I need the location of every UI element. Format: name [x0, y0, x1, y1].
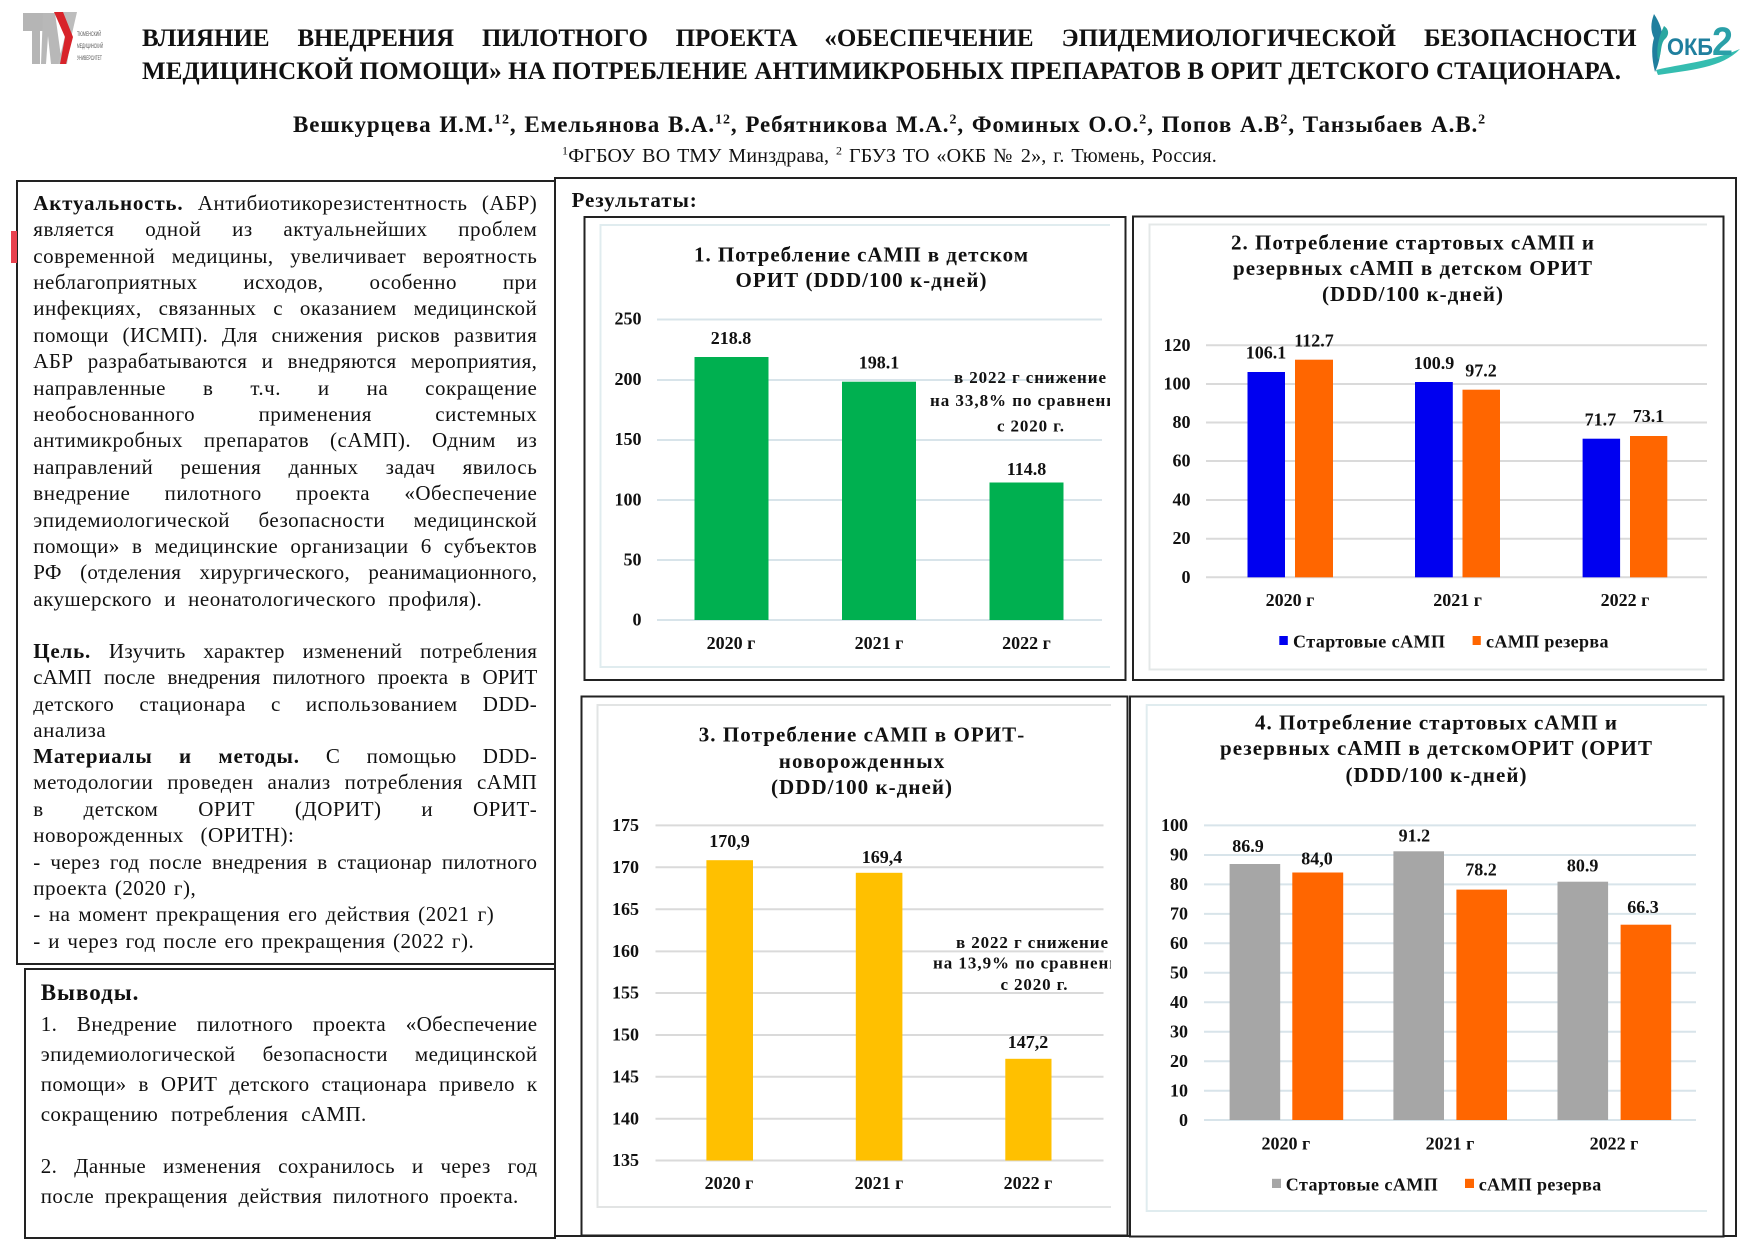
chart 2 y axis labels: 40	[1172, 490, 1190, 510]
title: «ОБЕСПЕЧЕНИЕ	[824, 25, 1034, 52]
chart 3 title: (DDD/100 к-дней)	[771, 775, 952, 799]
chart 3 y axis labels: 170	[612, 857, 639, 877]
chart 2 y axis labels: 60	[1172, 450, 1190, 470]
chart 4 y axis labels: 80	[1170, 874, 1188, 894]
chart 4 x labels: 2022 г	[1590, 1134, 1638, 1154]
chart 1 x labels: 2021 г	[855, 633, 903, 653]
text: relevance: внедрение пилотного проекта «Обеспечение	[33, 481, 537, 505]
chart 2 legend: Стартовые сАМП	[1293, 632, 1445, 652]
text: relevance: РФ (отделения хирургического, реанимационного,	[33, 560, 537, 584]
chart 3 y axis labels: 165	[612, 899, 639, 919]
chart 1 x labels: 2020 г	[707, 633, 755, 653]
chart 2 legend	[1279, 632, 1608, 652]
chart 2 plot	[1164, 331, 1707, 610]
panel: conclusions	[24, 968, 556, 1239]
text: conclusion 1: помощи» в ОРИТ детского стационара привело к	[41, 1072, 537, 1096]
title: ВНЕДРЕНИЯ	[298, 25, 454, 52]
text: conclusion 2: после прекращения действия пилотного проекта.	[41, 1184, 519, 1208]
chart 2 x labels: 2020 г	[1266, 590, 1314, 610]
text: relevance: направлений решения данных задач явилось	[33, 455, 537, 479]
chart 2 bars: reserve	[1295, 360, 1667, 577]
chart 1 values: 218.8	[711, 328, 751, 348]
chart 1 title: ОРИТ (DDD/100 к-дней)	[736, 268, 986, 292]
chart 3 x labels	[705, 1173, 1052, 1193]
text: materials and methods: Материалы и методы. С помощью DDD-	[33, 744, 537, 768]
text: materials and methods: - на момент прекращения его действия (2021 г)	[33, 902, 494, 926]
chart 4 y axis labels	[1161, 815, 1188, 1130]
chart 1 y axis labels: 50	[624, 550, 642, 570]
chart 3 title: новорожденных	[779, 749, 945, 773]
chart 3 values: 170,9	[709, 831, 750, 851]
title: МЕДИЦИНСКОЙ ПОМОЩИ» НА ПОТРЕБЛЕНИЕ АНТИМИКРОБНЫХ ПРЕПАРАТОВ В ОРИТ ДЕТСКОГО СТАЦИОНАРА.	[142, 57, 1621, 85]
chart 2 x labels	[1266, 590, 1649, 610]
chart 1 title: 1. Потребление сАМП в детском	[694, 242, 1028, 266]
logo: Tyumen Medical University	[23, 12, 103, 64]
text: aim: анализа	[33, 718, 106, 742]
chart 3 values: 147,2	[1008, 1032, 1048, 1052]
chart 2 x labels: 2021 г	[1433, 590, 1482, 610]
chart 4 y axis labels: 50	[1170, 962, 1188, 982]
text: conclusion 1: сокращению потребления сАМП.	[41, 1102, 367, 1126]
chart 3 y axis labels: 155	[612, 982, 639, 1002]
chart 2 title: (DDD/100 к-дней)	[1322, 282, 1503, 306]
chart 4 x labels: 2021 г	[1426, 1134, 1474, 1154]
chart 1 y axis labels	[614, 308, 642, 630]
chart 3 values: 169,4	[862, 847, 902, 867]
chart 3 y axis labels: 140	[612, 1108, 639, 1128]
chart 1 x labels	[707, 633, 1051, 653]
text: conclusion 2: 2. Данные изменения сохранилось и через год	[41, 1154, 537, 1178]
chart 3 y axis labels	[612, 815, 639, 1170]
chart 3 y axis labels: 160	[612, 941, 639, 961]
chart 4 values	[1232, 825, 1659, 917]
text: relevance: необоснованного применения системных	[33, 402, 537, 426]
chart 4 title: резервных сАМП в детскомОРИТ (ОРИТ	[1220, 736, 1652, 760]
chart 1 annotation: на 33,8% по сравнению	[930, 391, 1130, 410]
logo: OKB 2: ОКБ	[1667, 34, 1713, 61]
chart 2 y axis labels: 20	[1172, 528, 1190, 548]
panel: results	[554, 177, 1737, 1237]
chart 2 values	[1246, 331, 1664, 429]
chart 2 values: 112.7	[1294, 331, 1334, 351]
text: materials and methods: методологии проведен анализ потребления сАМП	[33, 770, 537, 794]
chart 4 values: 84,0	[1301, 848, 1333, 868]
chart 4 values: 86.9	[1232, 836, 1264, 856]
chart 3 x labels: 2020 г	[705, 1173, 753, 1193]
affiliations: 1ФГБОУ ВО ТМУ Минздрава, 2 ГБУЗ ТО «ОКБ № 2», г. Тюмень, Россия.	[562, 143, 1217, 167]
chart 4 legend: Стартовые сАМП	[1286, 1175, 1438, 1195]
chart 2 x labels: 2022 г	[1601, 590, 1649, 610]
chart 2 y axis labels: 80	[1172, 412, 1190, 432]
text: relevance: Актуальность. Антибиотикорезистентность (АБР)	[33, 191, 537, 215]
heading: conclusions: Выводы.	[41, 980, 139, 1005]
chart 4 y axis labels: 20	[1170, 1051, 1188, 1071]
chart 3 plot	[612, 815, 1104, 1193]
chart 4 legend: сАМП резерва	[1479, 1175, 1601, 1195]
chart 1 bars	[694, 357, 1064, 620]
chart 4 y axis labels: 10	[1170, 1080, 1188, 1100]
text: relevance: антимикробных препаратов (сАМП). Одним из	[33, 428, 537, 452]
chart 1 y axis labels: 0	[632, 610, 642, 630]
chart 1 y axis labels: 100	[614, 490, 642, 510]
chart 4 y axis labels: 60	[1170, 933, 1188, 953]
text: relevance: является одной из актуальнейших проблем	[33, 217, 537, 241]
chart 2 y axis labels	[1164, 335, 1190, 587]
chart 3 y axis labels: 150	[612, 1024, 639, 1044]
text: materials and methods: - через год после внедрения в стационар пилотного	[33, 850, 537, 874]
chart 4 title: (DDD/100 к-дней)	[1346, 763, 1526, 787]
chart 4 y axis labels: 30	[1170, 1021, 1188, 1041]
text: materials and methods: проекта (2020 г),	[33, 876, 196, 900]
chart 4 y axis labels: 0	[1179, 1110, 1188, 1130]
chart 2 title: резервных сАМП в детском ОРИТ	[1233, 256, 1592, 280]
chart 3 annotation	[933, 937, 1111, 990]
chart 3 x labels: 2021 г	[855, 1173, 903, 1193]
chart 1 annotation	[930, 372, 1110, 432]
chart 4 y axis labels: 40	[1170, 992, 1188, 1012]
text: aim: Цель. Изучить характер изменений потребления	[33, 639, 537, 663]
title: ПИЛОТНОГО	[482, 25, 648, 52]
chart 2 title: 2. Потребление стартовых сАМП и	[1231, 230, 1594, 254]
red marker	[11, 231, 17, 263]
chart 2 values: 97.2	[1465, 361, 1497, 381]
chart 1 y axis labels: 250	[614, 308, 642, 328]
chart 4 title	[1220, 710, 1652, 787]
text: conclusion 2	[41, 1154, 537, 1208]
chart 4 x labels	[1261, 1134, 1638, 1154]
chart 2 legend: сАМП резерва	[1486, 632, 1608, 652]
chart 1 annotation: в 2022 г снижение	[954, 368, 1106, 387]
chart 3 y axis labels: 135	[612, 1150, 639, 1170]
text: conclusion 1	[41, 1012, 538, 1126]
chart 4 y axis labels: 90	[1170, 845, 1188, 865]
chart 3 title	[699, 722, 1024, 799]
text: relevance: современной медицины, увеличивает вероятность	[33, 244, 537, 268]
title: БЕЗОПАСНОСТИ	[1424, 25, 1637, 52]
chart 4 values: 78.2	[1465, 860, 1497, 880]
chart 3 title: 3. Потребление сАМП в ОРИТ-	[699, 722, 1024, 746]
chart 4 plot	[1161, 815, 1696, 1154]
chart 1 annotation: с 2020 г.	[997, 416, 1064, 436]
chart 2 title	[1231, 230, 1594, 306]
text: aim	[33, 639, 537, 742]
chart 4 values: 66.3	[1627, 897, 1659, 917]
chart 1 plot	[614, 308, 1102, 653]
chart 4 values: 91.2	[1399, 825, 1430, 845]
title: ВЛИЯНИЕ	[142, 25, 270, 52]
chart 2 y axis labels: 0	[1182, 567, 1190, 587]
chart 1 y axis labels: 150	[614, 429, 642, 449]
chart 1 values: 114.8	[1007, 459, 1046, 479]
panel: chart 3	[582, 696, 1133, 1236]
text: relevance: инфекциях, связанных с оказанием медицинской	[33, 296, 537, 320]
chart 4 bars: starting	[1230, 851, 1608, 1120]
chart 1 y axis labels: 200	[614, 369, 642, 389]
chart 4 y axis labels: 100	[1161, 815, 1188, 835]
chart 4 values: 80.9	[1567, 855, 1598, 875]
chart 1 values	[711, 328, 1046, 479]
chart 3 y axis labels: 145	[612, 1066, 639, 1086]
logo: OKB 2	[1651, 14, 1740, 75]
text: conclusion 1: эпидемиологической безопасности медицинской	[41, 1042, 537, 1066]
chart 2 bars: starting	[1248, 372, 1620, 577]
text: relevance: эпидемиологической безопасности медицинской	[33, 508, 537, 532]
text: materials and methods: в детском ОРИТ (ДОРИТ) и ОРИТ-	[33, 797, 537, 821]
chart 1 title	[694, 242, 1028, 292]
chart 3 bars	[706, 860, 1052, 1160]
panel: chart 2	[1133, 216, 1724, 680]
chart 2 y axis labels: 100	[1164, 374, 1190, 394]
chart 4 y axis labels: 70	[1170, 904, 1188, 924]
text: aim: сАМП после внедрения пилотного проекта в ОРИТ	[33, 665, 537, 689]
chart 3 annotation: с 2020 г.	[1000, 975, 1068, 994]
chart 3 x labels: 2022 г	[1004, 1173, 1052, 1193]
chart 2 values: 71.7	[1585, 409, 1616, 429]
text: relevance: помощи (ИСМП). Для снижения рисков развития	[33, 323, 537, 347]
text: relevance	[33, 191, 537, 611]
chart 1 x labels: 2022 г	[1002, 633, 1051, 653]
chart 4 legend	[1272, 1175, 1601, 1195]
panel: introduction, aim, methods	[16, 180, 556, 965]
text: relevance: акушерского и неонатологического профиля).	[33, 587, 482, 611]
chart 3 annotation: на 13,9% по сравнению	[933, 954, 1133, 972]
text: relevance: помощи» в медицинские организации 6 субъектов	[33, 534, 537, 558]
chart 3 values	[709, 831, 1048, 1052]
chart 4 title: 4. Потребление стартовых сАМП и	[1255, 710, 1617, 734]
chart 3 annotation: в 2022 г снижение	[956, 933, 1108, 952]
text: conclusion 1: 1. Внедрение пилотного проекта «Обеспечение	[41, 1012, 537, 1036]
text: relevance: неблагоприятных исходов, особенно при	[33, 270, 537, 294]
chart 2 values: 73.1	[1633, 406, 1664, 426]
heading: results: Результаты:	[572, 188, 698, 212]
panel: chart 4	[1130, 696, 1724, 1236]
text: relevance: направленные в т.ч. и на сокращение	[33, 376, 537, 400]
title: ПРОЕКТА	[676, 25, 798, 52]
chart 4 bars: reserve	[1292, 872, 1671, 1120]
text: materials and methods	[33, 744, 537, 953]
text: relevance: АБР разрабатываются и внедряются мероприятия,	[33, 349, 537, 373]
text: materials and methods: - и через год после его прекращения (2022 г).	[33, 929, 474, 953]
text: materials and methods: новорожденных (ОРИТН):	[33, 823, 294, 847]
chart 4 x labels: 2020 г	[1261, 1134, 1310, 1154]
logo: OKB 2: 2	[1712, 20, 1733, 64]
text: aim: детского стационара с использованием DDD-	[33, 692, 537, 716]
chart 2 values: 106.1	[1246, 343, 1286, 363]
chart 2 values: 100.9	[1414, 353, 1454, 373]
chart 1 values: 198.1	[859, 353, 899, 373]
chart 3 y axis labels: 175	[612, 815, 639, 835]
chart 2 y axis labels: 120	[1164, 335, 1190, 355]
title: ЭПИДЕМИОЛОГИЧЕСКОЙ	[1062, 24, 1397, 52]
authors: Вешкурцева И.М.12, Емельянова В.А.12, Ребятникова М.А.2, Фоминых О.О.2, Попов А.В2, Танзыбаев А.В.2	[293, 112, 1486, 137]
panel: chart 1	[584, 217, 1130, 680]
title	[142, 24, 1637, 85]
